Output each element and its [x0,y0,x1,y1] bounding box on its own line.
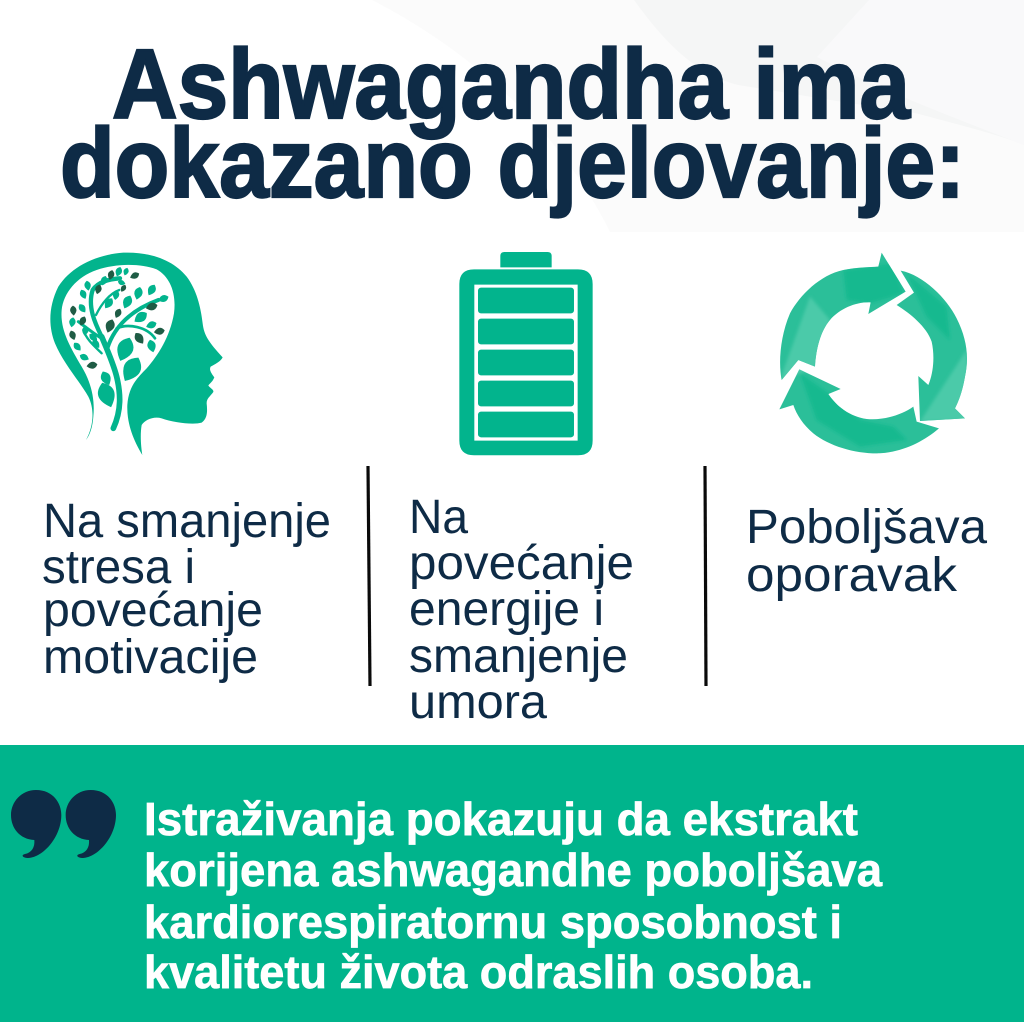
icon: head with tree [50,253,223,455]
column text: stress: stresa i [42,541,195,594]
title: dokazano djelovanje: [60,108,965,218]
column text: stress: motivacije [43,631,258,684]
divider right [705,466,706,686]
column text: stress: povećanje [43,584,263,637]
column text: energy: Na [409,491,468,544]
background swoosh [0,0,1024,232]
column text: energy [409,491,634,729]
quote text: kardiorespiratornu sposobnost i [144,896,842,948]
tree trunk and branches [78,278,158,428]
title [60,29,965,218]
column text: recovery: oporavak [746,549,958,602]
column text: energy: povećanje [409,537,634,590]
column text: recovery [746,501,987,602]
icon: recovery cycle arrows [779,252,967,454]
tree leaves [68,266,170,410]
panel: research quote [0,745,1024,1022]
column text: energy: energije i [409,583,604,636]
quote text: Istraživanja pokazuju da ekstrakt [144,793,858,845]
column text: recovery: Poboljšava [746,501,987,554]
title: Ashwagandha ima [112,29,911,139]
divider left [368,466,370,686]
quote text: korijena ashwagandhe poboljšava [144,844,882,896]
column text: energy: smanjenje [409,630,628,683]
icon: quotation mark [11,790,116,858]
column text: stress: Na smanjenje [43,495,331,548]
column text: energy: umora [409,676,547,729]
column text: stress [42,495,331,684]
quote text [144,793,882,998]
quote text: kvalitetu života odraslih osoba. [144,946,813,998]
dark leaves [68,269,165,370]
icon: battery [459,252,593,455]
